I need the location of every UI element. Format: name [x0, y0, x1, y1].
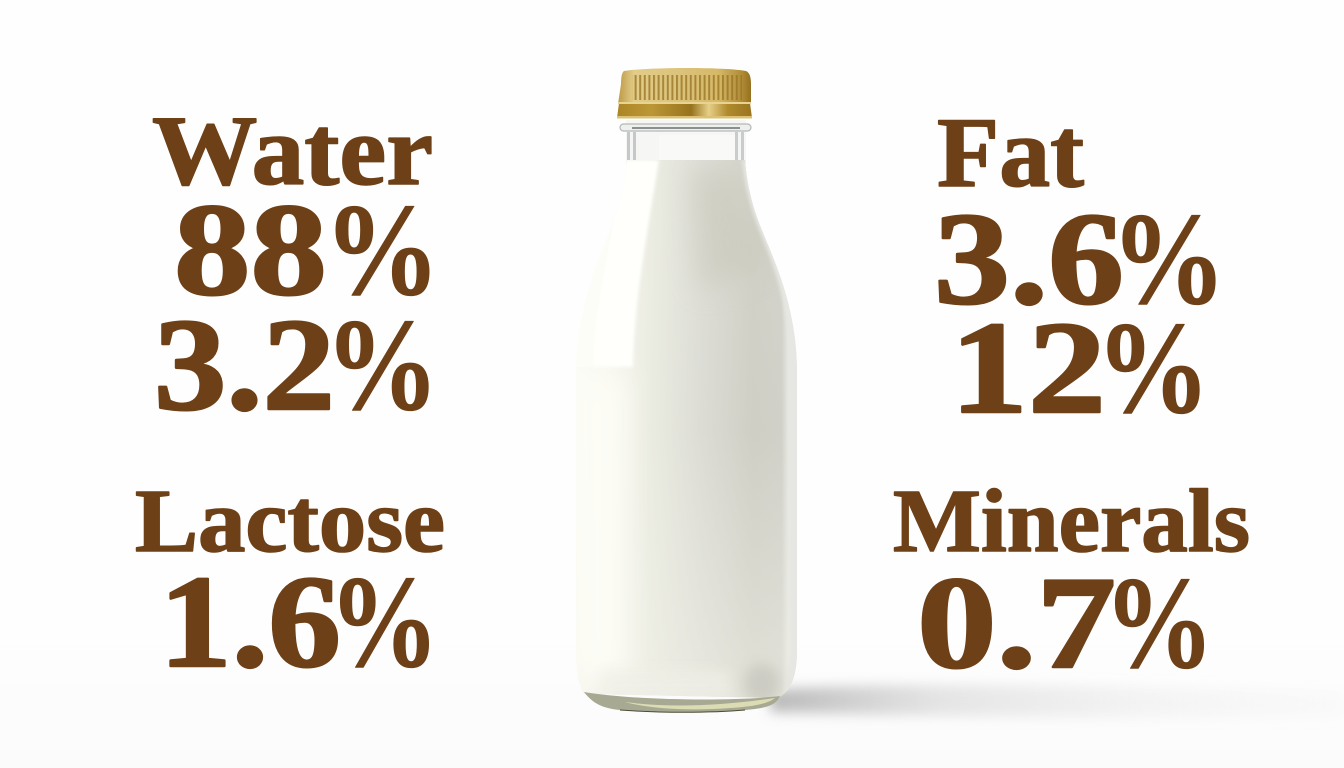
left column labels: [135, 95, 445, 695]
left highlight: [592, 160, 659, 367]
value: 1.6%: %: [329, 548, 439, 695]
right rim: [742, 160, 786, 310]
value: 88%: 88: [174, 176, 327, 323]
value: 3.2%: 3.2: [154, 291, 335, 438]
value: 88%: [174, 176, 440, 323]
value: 88%: %: [324, 176, 440, 323]
value: 12%: %: [1096, 294, 1210, 441]
glass base: [584, 692, 780, 712]
value: 3.6%: %: [1111, 185, 1226, 332]
value: 1.6%: 1.6: [159, 548, 341, 695]
value: 3.2%: %: [325, 291, 439, 438]
value: 12%: [950, 294, 1210, 441]
label: Water: Water: [152, 95, 433, 206]
value: 0.7%: [917, 549, 1214, 696]
bottle shadow: [770, 685, 1344, 718]
value: 3.6%: 3.6: [934, 185, 1124, 332]
value: 3.6%: [934, 185, 1226, 332]
milk body: [570, 155, 805, 705]
gold cap: [617, 68, 752, 118]
infographic canvas: [136, 68, 1249, 722]
lower right corner shade: [744, 664, 780, 704]
value: 1.6%: [159, 548, 439, 695]
value: 0.7%: %: [1104, 549, 1214, 696]
label: Fat: Fat: [937, 97, 1084, 208]
label: Minerals: Minerals: [893, 472, 1250, 571]
bottle neck glass: [620, 120, 751, 164]
right column labels: [893, 97, 1250, 696]
milk bottle: [570, 68, 805, 712]
shoulder shading: [688, 170, 749, 280]
value: 12%: 12: [950, 294, 1106, 441]
value: 0.7%: 0.7: [917, 549, 1116, 696]
left cream fill: [570, 160, 620, 367]
value: 3.2%: [154, 291, 439, 438]
label: Lactose: Lactose: [135, 472, 445, 571]
